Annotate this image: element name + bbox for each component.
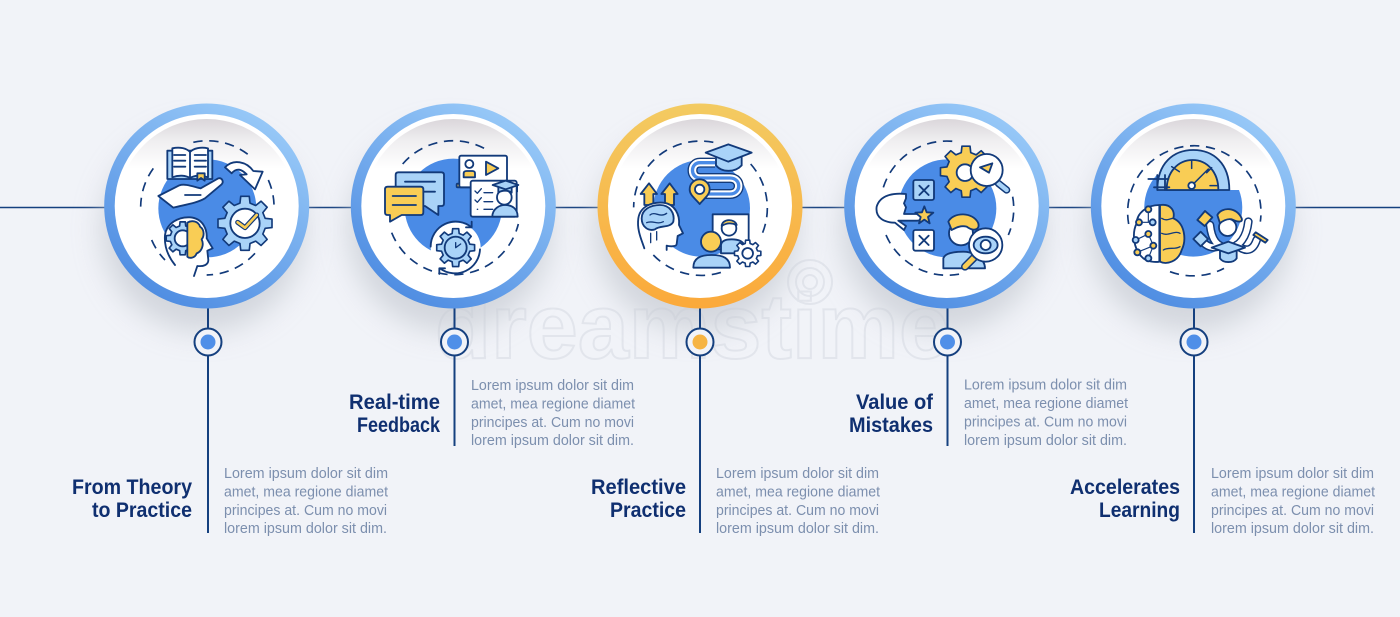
connector: stem and node 5: [1180, 300, 1208, 533]
text block 3: principes at. Cum no movi: [716, 503, 879, 519]
text block 5: lorem ipsum dolor sit dim.: [1211, 521, 1374, 537]
connector: stem and node 2: [441, 300, 468, 446]
connector: stem and node 3: [686, 300, 714, 533]
icon: book, hand, gear and head: [141, 141, 274, 276]
text block 1: lorem ipsum dolor sit dim.: [224, 521, 387, 537]
text block 5: principes at. Cum no movi: [1211, 503, 1374, 519]
watermark: dreamstime: [435, 276, 950, 378]
connector: stem and node 4: [934, 300, 961, 446]
heading: Accelerates Learning: Accelerates: [1070, 476, 1180, 499]
text block 3: [716, 466, 880, 537]
heading: Value of Mistakes: Value of: [856, 391, 934, 414]
heading: Reflective Practice: Reflective: [591, 476, 686, 499]
panel: Real-time Feedback: [348, 104, 635, 449]
text block 1: amet, mea regione diamet: [224, 484, 388, 500]
text block 3: amet, mea regione diamet: [716, 484, 880, 500]
heading: Real-time Feedback: Real-time: [349, 391, 440, 414]
text block 4: [964, 378, 1128, 449]
icon: chat, monitor, checklist and clock gear: [385, 141, 518, 275]
icon: gear, crosses, pointing hand and magnifier: [876, 141, 1014, 275]
heading: From Theory to Practice: From Theory: [72, 476, 192, 499]
ring 4: [844, 104, 1049, 308]
heading: From Theory to Practice: to Practice: [92, 499, 192, 522]
text block 5: [1211, 466, 1375, 537]
text block 4: amet, mea regione diamet: [964, 396, 1128, 412]
ring 3 (highlighted): [598, 104, 802, 308]
panel: Reflective Practice: [591, 104, 880, 537]
ring 5: [1091, 104, 1296, 308]
text block 4: lorem ipsum dolor sit dim.: [964, 433, 1127, 449]
heading: Reflective Practice: Practice: [610, 499, 686, 522]
panel: Accelerates Learning: [1070, 104, 1375, 537]
text block 2: amet, mea regione diamet: [471, 396, 635, 412]
text block 3: lorem ipsum dolor sit dim.: [716, 521, 879, 537]
heading: Value of Mistakes: [849, 391, 934, 437]
timeline: horizontal connector line: [0, 206, 1400, 208]
icon: speed gauge, brain and student: [1128, 146, 1268, 276]
ring 2: [351, 104, 556, 308]
heading: Real-time Feedback: Feedback: [357, 414, 440, 437]
text block 2: Lorem ipsum dolor sit dim: [471, 378, 634, 394]
panel: From Theory to Practice: [72, 104, 388, 537]
heading: Accelerates Learning: [1070, 476, 1180, 522]
text block 5: Lorem ipsum dolor sit dim: [1211, 466, 1374, 482]
text block 3: Lorem ipsum dolor sit dim: [716, 466, 879, 482]
text block 2: [471, 378, 635, 449]
text block 2: principes at. Cum no movi: [471, 415, 634, 431]
text block 5: amet, mea regione diamet: [1211, 484, 1375, 500]
panel: Value of Mistakes: [841, 104, 1128, 449]
text block 1: [224, 466, 388, 537]
heading: Value of Mistakes: Mistakes: [849, 414, 933, 437]
ring 1: [104, 104, 309, 308]
heading: Real-time Feedback: [349, 391, 440, 437]
icon: road, cap, head and video call: [634, 141, 767, 275]
text block 1: principes at. Cum no movi: [224, 503, 387, 519]
text block 2: lorem ipsum dolor sit dim.: [471, 433, 634, 449]
connector: stem and node 1: [194, 300, 222, 533]
text block 1: Lorem ipsum dolor sit dim: [224, 466, 388, 482]
text block 4: principes at. Cum no movi: [964, 414, 1127, 430]
text block 4: Lorem ipsum dolor sit dim: [964, 378, 1127, 394]
heading: Reflective Practice: [591, 476, 686, 522]
heading: Accelerates Learning: Learning: [1099, 499, 1180, 522]
heading: From Theory to Practice: [72, 476, 192, 522]
